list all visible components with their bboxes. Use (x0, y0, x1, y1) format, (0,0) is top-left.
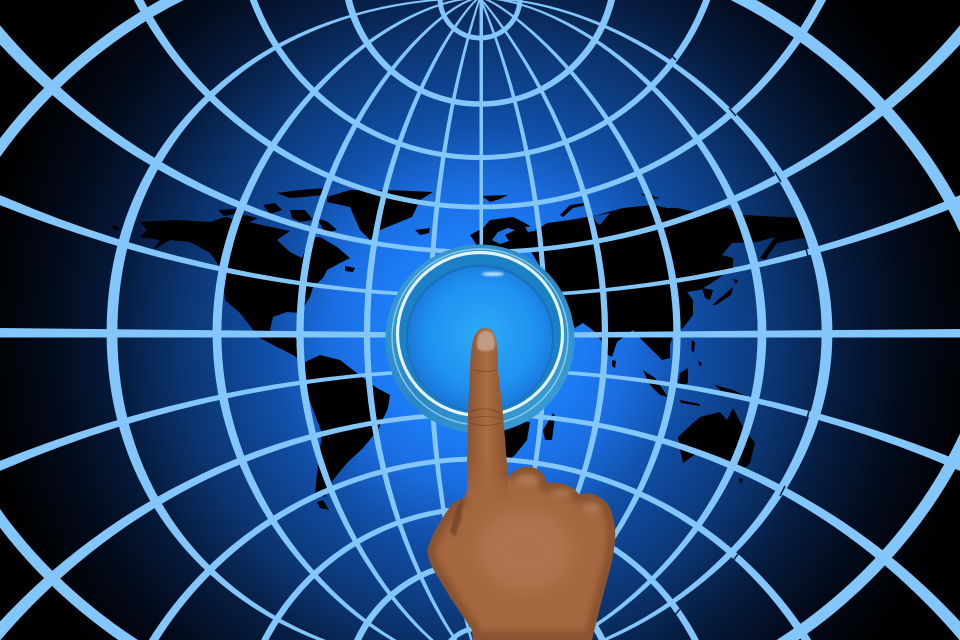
islands: Svalbard, Franz Josef and Novaya Zemlya (482, 193, 660, 217)
continent: North America (140, 217, 350, 358)
continent: Arctic islands (112, 188, 355, 272)
finger creases (469, 370, 502, 426)
islands: Indonesia and Philippines (612, 340, 750, 406)
seas cut out of the land (492, 213, 610, 244)
finger shading (467, 328, 508, 500)
islands: Japan and Korea (702, 279, 738, 305)
continent: South America (305, 355, 390, 510)
button (386, 244, 574, 434)
continent: Australia (678, 408, 755, 484)
continent: Africa (470, 420, 530, 463)
button: outer bezel (386, 244, 574, 434)
hand: soft shading (428, 467, 615, 640)
continent: Eurasia (470, 205, 807, 360)
button: glossy disc (408, 267, 552, 411)
button: highlight (482, 272, 504, 276)
continent: Greenland (327, 190, 433, 240)
world map continents (112, 188, 807, 510)
button: inner band (406, 264, 554, 412)
hand: palm and finger silhouette (428, 328, 615, 640)
button: white ring (398, 252, 562, 416)
button: bezel shine lines (392, 249, 568, 425)
hand (428, 328, 615, 640)
island: Iceland (415, 228, 430, 235)
fingernail (477, 331, 495, 351)
island: Madagascar (543, 413, 555, 440)
